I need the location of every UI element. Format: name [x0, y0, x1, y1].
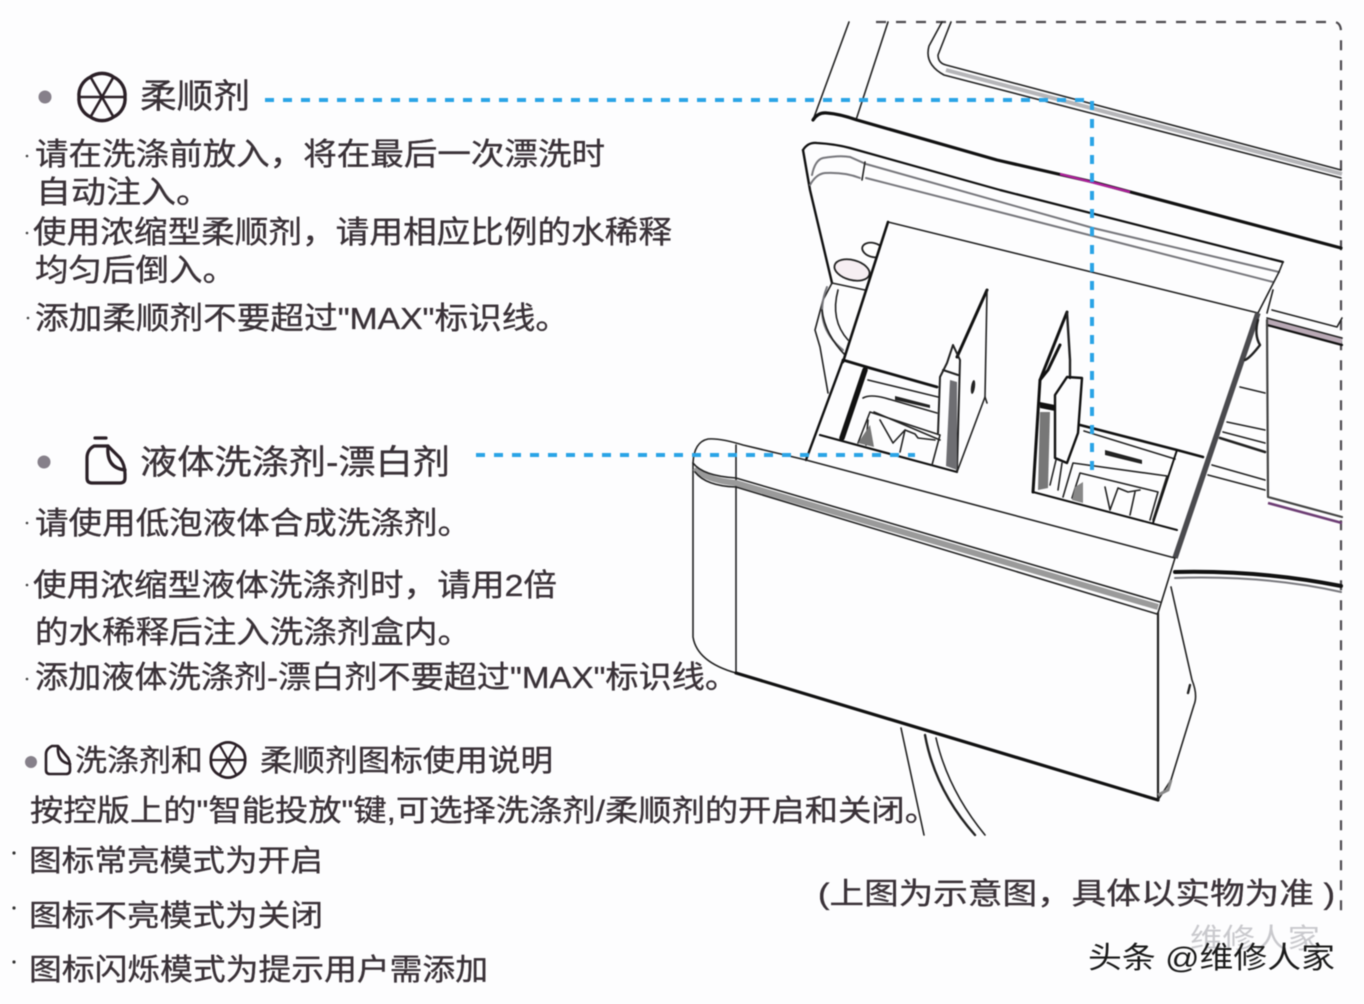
liquid detergent section	[26, 438, 738, 695]
mode list: 图标闪烁模式为提示用户需添加	[29, 954, 488, 987]
washing machine drawer illustration	[693, 22, 1342, 835]
body text	[26, 137, 672, 336]
bullet	[38, 456, 50, 468]
watermark: 维修人家	[1190, 923, 1320, 954]
blue dashed leader: liquid detergent	[476, 453, 915, 457]
body text: 使用浓缩型柔顺剂，请用相应比例的水稀释	[33, 215, 672, 250]
watermark: 头条 @维修人家	[1088, 942, 1335, 975]
body text: 添加液体洗涤剂-漂白剂不要超过"MAX"标识线。	[35, 660, 738, 695]
instruction: 按控版上的"智能投放"键,可选择洗涤剂/柔顺剂的开启和关闭。	[30, 795, 938, 828]
body text: 使用浓缩型液体洗涤剂时，请用2倍	[33, 568, 557, 603]
watermark	[1088, 923, 1335, 975]
body text: 均匀后倒入。	[35, 253, 236, 288]
right compartment	[1033, 312, 1203, 530]
machine top panel	[803, 22, 1342, 283]
icon: small softener flower	[211, 742, 245, 778]
heading: 柔顺剂	[140, 78, 250, 116]
body text: 请使用低泡液体合成洗涤剂。	[35, 506, 471, 541]
icon: small detergent bottle	[46, 746, 70, 774]
bullet	[25, 756, 37, 768]
mode list: 图标不亮模式为关闭	[29, 900, 323, 933]
illustration note: (上图为示意图，具体以实物为准 )	[818, 878, 1335, 911]
softener section	[26, 73, 672, 336]
body text: 自动注入。	[36, 175, 211, 210]
body text: 请在洗涤前放入，将在最后一次漂洗时	[35, 137, 605, 172]
bullet	[38, 90, 52, 104]
mode list	[12, 845, 488, 987]
icon: softener flower	[79, 73, 125, 121]
hoses below drawer	[901, 728, 985, 835]
open flap	[815, 222, 1283, 545]
body text: 添加柔顺剂不要超过"MAX"标识线。	[35, 301, 569, 336]
mode list: 图标常亮模式为开启	[29, 845, 323, 878]
icon: detergent bottle	[87, 438, 125, 483]
blue dashed leader: softener	[265, 100, 1092, 478]
front drawer panel	[693, 439, 1196, 800]
right side of machine	[1175, 290, 1342, 592]
body text: 的水稀释后注入洗涤剂盒内。	[35, 615, 471, 650]
left compartment	[806, 290, 987, 472]
body text	[26, 506, 738, 695]
heading part two: 柔顺剂图标使用说明	[260, 745, 553, 778]
heading: 液体洗涤剂-漂白剂	[140, 444, 450, 482]
dashed frame	[876, 22, 1341, 920]
icon usage section	[12, 742, 938, 987]
heading part one: 洗涤剂和	[75, 745, 203, 778]
